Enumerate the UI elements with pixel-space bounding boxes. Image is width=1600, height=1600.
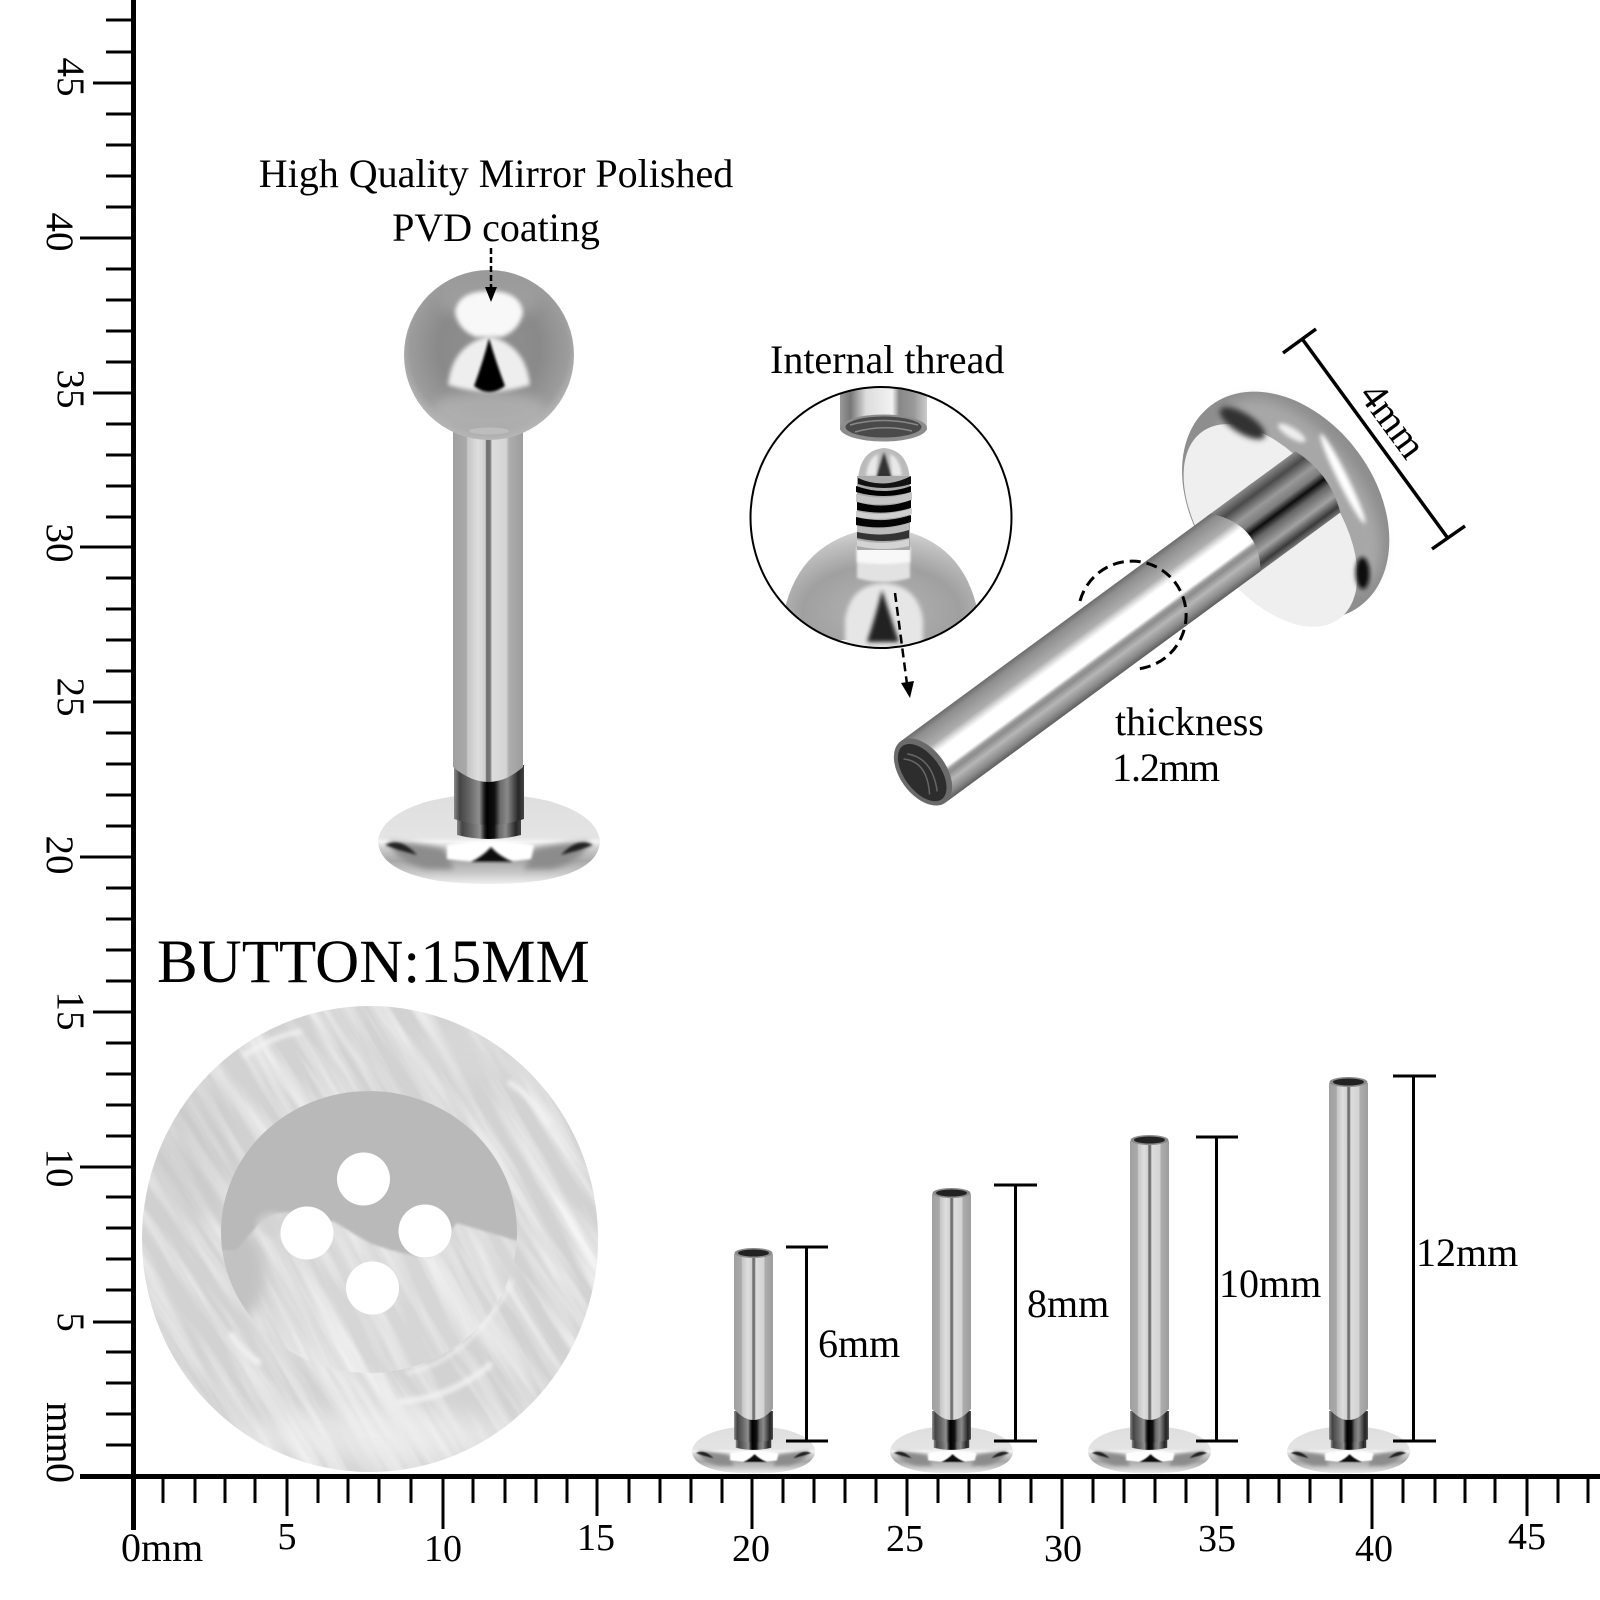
- stud 10mm: [1088, 1135, 1211, 1474]
- dimension: 4mm: [1283, 329, 1465, 549]
- x axis labels: 25: [886, 1518, 924, 1560]
- recess upper dark area: [215, 1090, 525, 1257]
- zoom circle: internal thread detail: [750, 380, 1012, 660]
- shaft: [901, 503, 1270, 803]
- heading: mirror polished label: High Quality Mirror Polished: [259, 151, 733, 196]
- button: 15mm photo: [142, 1006, 598, 1472]
- dimension: 6mm: 6mm: [818, 1321, 900, 1366]
- soft pale patches: [250, 1409, 510, 1461]
- y axis labels: mm0: [38, 1402, 83, 1483]
- x axis labels: 40: [1355, 1528, 1393, 1570]
- button disc: [142, 1006, 598, 1472]
- angled stud without ball: [830, 352, 1432, 886]
- x axis labels: 45: [1508, 1516, 1546, 1558]
- y axis labels: 45: [49, 58, 92, 96]
- pearl streak texture: [142, 1006, 598, 1472]
- x axis labels: 20: [732, 1528, 770, 1570]
- thickness label: [1112, 699, 1264, 790]
- vertical ticks: [80, 20, 131, 1445]
- dimension: 8mm: [994, 1185, 1109, 1441]
- dashed thickness circle: [1080, 561, 1186, 669]
- arrow: coating pointer: [485, 248, 497, 302]
- dimension: 12mm: [1393, 1076, 1518, 1441]
- y axis labels: 15: [49, 992, 92, 1030]
- thickness label: thickness: [1115, 699, 1264, 744]
- recessed centre: [221, 1091, 517, 1373]
- arrow: thread pointer: [895, 593, 914, 698]
- barrel: [786, 380, 976, 660]
- horizontal axis: [80, 1474, 1600, 1479]
- stud 12mm: [1287, 1077, 1410, 1474]
- y axis labels: 10: [38, 1148, 81, 1188]
- heading: internal thread: Internal thread: [770, 337, 1004, 382]
- dimension: 12mm: 12mm: [1416, 1230, 1518, 1275]
- stud 6mm: [692, 1248, 815, 1474]
- disc rim: [1139, 352, 1432, 660]
- x axis labels: 30: [1044, 1528, 1082, 1570]
- heading: button size: BUTTON:15MM: [157, 929, 590, 996]
- heading: PVD coating label: PVD coating: [392, 205, 600, 250]
- y axis labels: 40: [38, 212, 81, 252]
- y axis labels: 20: [38, 836, 81, 874]
- stud 8mm: [890, 1188, 1013, 1474]
- thickness label: 1.2mm: [1112, 745, 1220, 790]
- threaded collar, near step: [1207, 477, 1306, 578]
- vertical axis: [131, 0, 136, 1530]
- x axis labels: 15: [577, 1517, 615, 1559]
- open tip: [882, 728, 964, 816]
- horizontal ticks: [163, 1478, 1588, 1529]
- dome: [786, 527, 976, 640]
- recess lower-left shade: [222, 1236, 266, 1316]
- stud shaft: [453, 430, 523, 782]
- ball: [404, 270, 574, 440]
- rim shading: [1215, 401, 1270, 445]
- x axis labels: 10: [424, 1528, 462, 1570]
- button highlights: [232, 1032, 548, 1402]
- threaded collar, far section: [1247, 447, 1346, 548]
- x axis labels: [121, 1516, 1546, 1570]
- dimension: 10mm: 10mm: [1219, 1261, 1321, 1306]
- y axis labels: 30: [38, 524, 81, 562]
- x axis labels: 35: [1198, 1518, 1236, 1560]
- y axis labels: 25: [49, 678, 92, 716]
- assembled labret stud with ball: [378, 270, 600, 884]
- x axis labels: 5: [278, 1516, 296, 1558]
- circle outline: [750, 387, 1012, 648]
- x axis labels: 0mm: [121, 1525, 203, 1570]
- button holes: [280, 1152, 452, 1314]
- dimension: 4mm: 4mm: [1351, 374, 1436, 467]
- y axis labels: 35: [49, 370, 92, 408]
- dimension: 8mm: 8mm: [1027, 1281, 1109, 1326]
- dimension: 10mm: [1196, 1137, 1321, 1441]
- dimension: 6mm: [786, 1247, 900, 1441]
- y axis labels: 5: [49, 1312, 92, 1332]
- screw post: [858, 448, 910, 476]
- y axis labels: [38, 58, 92, 1483]
- stud base disc: [378, 765, 600, 884]
